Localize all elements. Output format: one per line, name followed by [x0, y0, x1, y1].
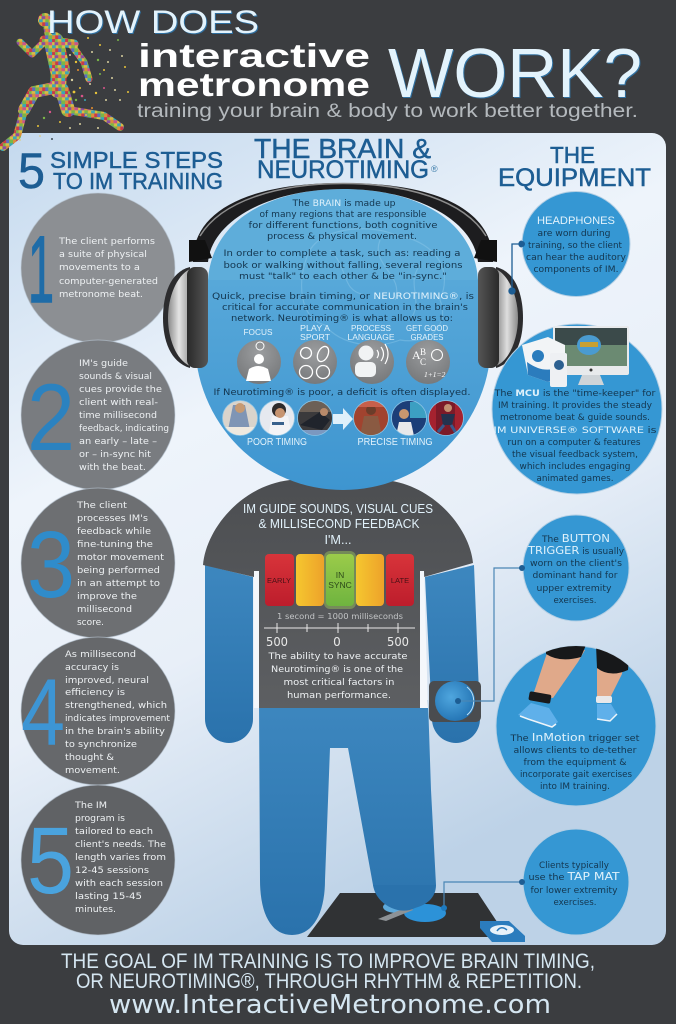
- shirt text: & MILLISECOND FEEDBACK: [258, 516, 420, 531]
- feedback bar: EARLY: [267, 576, 291, 585]
- footer goal statement: THE GOAL OF IM TRAINING IS TO IMPROVE BRAIN TIMING,: [61, 950, 595, 973]
- step 2: cues provide the: [79, 385, 162, 395]
- panel: tap mat callout: [519, 829, 629, 935]
- text: neurotiming performance: [267, 652, 408, 701]
- panel: mcu callout: The MCU is the "time-keeper" for: [493, 389, 656, 399]
- left arm: [205, 565, 253, 743]
- step 2: with the beat.: [79, 463, 146, 473]
- step 3: 3: [27, 512, 75, 618]
- connector: headphones: [509, 241, 525, 294]
- shirt text: [243, 501, 433, 547]
- step 1: [21, 193, 175, 343]
- feedback bar: [265, 551, 414, 609]
- panel: inmotion callout: [496, 645, 656, 806]
- step 2: client with real-: [79, 398, 158, 408]
- panel: inmotion callout: allows clients to de-tether: [514, 746, 637, 756]
- headphones and brain circle: [163, 183, 523, 490]
- step 2: an early – late –: [79, 437, 157, 447]
- panel: button trigger callout: The BUTTON: [541, 532, 610, 545]
- panel: mcu callout: run on a computer & features: [508, 438, 641, 448]
- icon: focus: FOCUS: [244, 328, 272, 337]
- icon: get good grades: 1+1=2: [424, 370, 446, 379]
- heading: the brain and neurotiming: [254, 133, 438, 184]
- panel: button trigger callout: worn on the client's: [530, 559, 623, 569]
- step 1: computer-generated: [59, 277, 158, 287]
- step 1: movements to a: [59, 263, 140, 273]
- step 3: improve the: [77, 592, 137, 602]
- text: brain intro: Quick, precise brain timing, or NEUROTIMING® , is: [212, 292, 475, 302]
- step 4: movement.: [65, 766, 120, 776]
- tagline: training your brain & body to work better together.: [137, 101, 638, 122]
- step 4: to synchronize: [65, 740, 137, 750]
- text: neurotiming performance: Neurotiming® is one of the: [271, 665, 403, 675]
- text: brain intro: In order to complete a task, such as: reading a: [224, 249, 460, 259]
- icon: legs with ankle triggers: [518, 645, 630, 727]
- step 5: client's needs. The: [75, 840, 166, 850]
- icon: tap mat and foot: [307, 885, 507, 937]
- step 3: The client: [76, 501, 128, 511]
- photos: precise timing: PRECISE TIMING: [358, 437, 433, 448]
- connector: tap mat: [441, 882, 522, 911]
- step 5: tailored to each: [75, 827, 153, 837]
- icon: get good grades: B: [420, 347, 426, 357]
- step 1: 1: [28, 217, 54, 323]
- millisecond scale: 0: [333, 635, 341, 649]
- icon: right ear cup: [478, 267, 523, 368]
- heading: the brain and neurotiming: THE BRAIN &: [254, 133, 431, 164]
- step 2: time millisecond: [79, 411, 157, 421]
- step 3: in an attempt to: [77, 579, 160, 589]
- legs: [259, 700, 436, 935]
- panel: mcu callout: animated games.: [536, 474, 614, 484]
- step 4: As millisecond: [65, 650, 136, 660]
- icon: faint brain outline: [302, 229, 444, 345]
- step 2: IM's guide: [79, 359, 128, 369]
- step 4: in the brain's ability: [65, 727, 165, 737]
- panel: headphones callout: training, so the client: [528, 241, 623, 251]
- text: neurotiming performance: human performance.: [287, 691, 391, 701]
- text: brain intro: [212, 199, 475, 324]
- panel: mcu callout: IM UNIVERSE® SOFTWARE is: [494, 426, 657, 436]
- footer goal statement: [61, 950, 595, 993]
- text: brain intro: The BRAIN is made up: [291, 199, 396, 209]
- icon: button trigger: [429, 681, 481, 722]
- gap left of torso: [254, 571, 259, 708]
- step 5: program is: [75, 814, 126, 824]
- connector: button trigger: [455, 568, 522, 704]
- text: brain intro: must "talk" to each other & be "in-sync.": [239, 272, 447, 282]
- step 5: 5: [27, 808, 74, 914]
- panel: mcu callout: metronome beat & guide sounds.: [500, 413, 650, 423]
- panel: button trigger callout: upper extremity: [536, 584, 612, 594]
- icon: get good grades: [406, 324, 450, 384]
- feedback bar: SYNC: [328, 580, 352, 590]
- icon: process language: [348, 324, 394, 384]
- step 3: [21, 488, 175, 638]
- step 4: efficiency is: [65, 688, 126, 698]
- panel: brain circle: [195, 189, 491, 490]
- footer goal statement: OR NEUROTIMING®, THROUGH RHYTHM & REPETITION.: [76, 970, 582, 993]
- step 3: feedback while: [77, 527, 151, 537]
- icon: get good grades: GRADES: [410, 333, 444, 342]
- step 2: 2: [27, 365, 75, 471]
- step 1: a suite of physical: [59, 250, 147, 260]
- human figure: [203, 480, 480, 935]
- panel: headphones callout: are worn during: [538, 229, 610, 239]
- panel: tap mat callout: exercises.: [554, 898, 596, 908]
- icon: play a sport: PLAY A: [300, 324, 331, 333]
- step 1: The client performs: [58, 237, 156, 247]
- step 4: strengthened, which: [65, 701, 167, 711]
- step 4: improved, neural: [65, 676, 149, 686]
- heading: the brain and neurotiming: ®: [431, 164, 438, 174]
- icon: get good grades: GET GOOD: [406, 324, 448, 333]
- text: brain intro: process & physical movement.: [267, 232, 417, 242]
- panel: inmotion callout: into IM training.: [540, 782, 610, 792]
- step 4: thought &: [65, 753, 114, 763]
- panel: mcu callout: which includes engaging: [520, 462, 630, 472]
- heading: the brain and neurotiming: NEUROTIMING: [257, 156, 429, 184]
- icon: get good grades: C: [420, 357, 426, 367]
- panel: inmotion callout: from the equipment &: [524, 758, 627, 768]
- shirt text: I'M...: [324, 532, 352, 547]
- millisecond scale: [264, 612, 415, 649]
- gap right of torso: [420, 571, 428, 708]
- step 4: [21, 637, 175, 785]
- heading: 5 simple steps: [18, 143, 223, 199]
- step 5: minutes.: [75, 905, 116, 915]
- heading: 5 simple steps: 5: [18, 143, 45, 199]
- millisecond scale: 500: [266, 635, 288, 649]
- step 4: 4: [21, 660, 65, 766]
- step 3: being performed: [77, 566, 160, 576]
- heading: the equipment: THE: [550, 142, 595, 168]
- text: brain intro: network. Neurotiming® is what allows us to:: [231, 314, 453, 324]
- photos: poor timing: [222, 400, 333, 448]
- panel: mcu callout: the visual feedback system,: [512, 450, 638, 460]
- right arm: [425, 565, 480, 743]
- panel: button trigger callout: dominant hand for: [532, 571, 618, 581]
- icon: mcu box: [522, 337, 567, 387]
- heading: 5 simple steps: SIMPLE STEPS: [50, 147, 223, 173]
- arrow: poor to precise: [333, 408, 353, 430]
- panel: headphones callout: components of IM.: [534, 265, 618, 275]
- step 2: [21, 340, 175, 490]
- text: brain intro: book or walking without falling, several regions: [224, 261, 463, 271]
- step 3: score.: [77, 618, 104, 628]
- panel: button trigger callout: exercises.: [554, 596, 596, 606]
- title: [47, 4, 642, 122]
- step 3: fine-tuning the: [77, 540, 153, 550]
- step 2: sounds & visual: [79, 372, 152, 382]
- text: brain intro: for different functions, both cognitive: [248, 221, 438, 231]
- icon: play a sport: SPORT: [300, 333, 330, 342]
- heading: 5 simple steps: TO IM TRAINING: [53, 168, 223, 194]
- heading: the equipment: EQUIPMENT: [498, 164, 651, 192]
- text: brain intro: of many regions that are responsible: [260, 210, 426, 220]
- photos: precise timing: [353, 400, 464, 448]
- title: how does: HOW DOES: [47, 4, 259, 40]
- panel: headphones callout: HEADPHONES: [537, 215, 615, 227]
- text: neurotiming performance: most critical factors in: [284, 678, 394, 688]
- icon: left ear cup: [163, 267, 208, 368]
- panel: headphones callout: can hear the auditory: [526, 253, 626, 263]
- panel: button trigger callout: TRIGGER is usually: [527, 544, 624, 557]
- panel: tap mat callout: for lower extremity: [530, 886, 618, 896]
- shirt: [203, 480, 473, 708]
- title: metronome: metronome: [138, 66, 370, 103]
- icon: mcu box on mat: [480, 921, 525, 942]
- panel: tap mat callout: use the TAP MAT: [528, 870, 620, 883]
- step 5: lasting 15-45: [75, 892, 142, 902]
- feedback bar: IN: [336, 570, 344, 580]
- title: work: WORK?: [388, 34, 642, 112]
- step 5: length varies from: [75, 853, 166, 863]
- millisecond scale: 1 second = 1000 milliseconds: [277, 612, 403, 621]
- step 4: indicates improvement: [65, 714, 171, 724]
- feedback bar: LATE: [391, 576, 409, 585]
- step 5: 12-45 sessions: [75, 866, 150, 876]
- panel: mcu callout: IM training. It provides the steady: [498, 401, 652, 411]
- step 2: feedback, indicating: [79, 424, 169, 434]
- step 5: [21, 785, 175, 935]
- step 4: accuracy is: [65, 663, 120, 673]
- text: brain intro: critical for accurate communication in the brain's: [222, 303, 469, 313]
- icon: process language: PROCESS: [351, 324, 391, 333]
- step 3: processes IM's: [77, 514, 149, 524]
- icon: headphone band: [189, 183, 497, 262]
- icon: play a sport: [293, 324, 337, 384]
- step 3: motor movement: [77, 553, 165, 563]
- title: interactive: interactive: [138, 37, 370, 74]
- step 5: The IM: [74, 801, 107, 811]
- millisecond scale: 500: [387, 635, 409, 649]
- text: neurotiming performance: The ability to have accurate: [267, 652, 408, 662]
- icon: focus: [237, 328, 281, 384]
- step 3: millisecond: [77, 605, 132, 615]
- icon: multicoloured running figure: [3, 13, 129, 147]
- photos: poor timing: POOR TIMING: [247, 437, 307, 448]
- heading: the equipment: [498, 142, 651, 192]
- text: deficit line: If Neurotiming® is poor, a deficit is often displayed.: [214, 388, 470, 398]
- shirt text: IM GUIDE SOUNDS, VISUAL CUES: [243, 501, 433, 516]
- panel: headphones callout: [519, 192, 630, 296]
- panel: button trigger callout: [519, 515, 629, 621]
- icon: computer monitor: [553, 326, 629, 385]
- icon: process language: LANGUAGE: [348, 333, 394, 342]
- icon: get good grades: A: [412, 348, 421, 362]
- footer website: www.InteractiveMetronome.com: [109, 990, 551, 1020]
- panel: inmotion callout: The InMotion trigger set: [509, 731, 640, 744]
- step 5: with each session: [75, 879, 163, 889]
- panel: tap mat callout: Clients typically: [539, 861, 609, 871]
- step 1: metronome beat.: [59, 290, 143, 300]
- panel: main content: [9, 133, 666, 945]
- panel: inmotion callout: incorporate gait exercises: [520, 770, 633, 780]
- step 2: or – in-sync hit: [79, 450, 152, 460]
- panel: mcu callout: [492, 324, 662, 494]
